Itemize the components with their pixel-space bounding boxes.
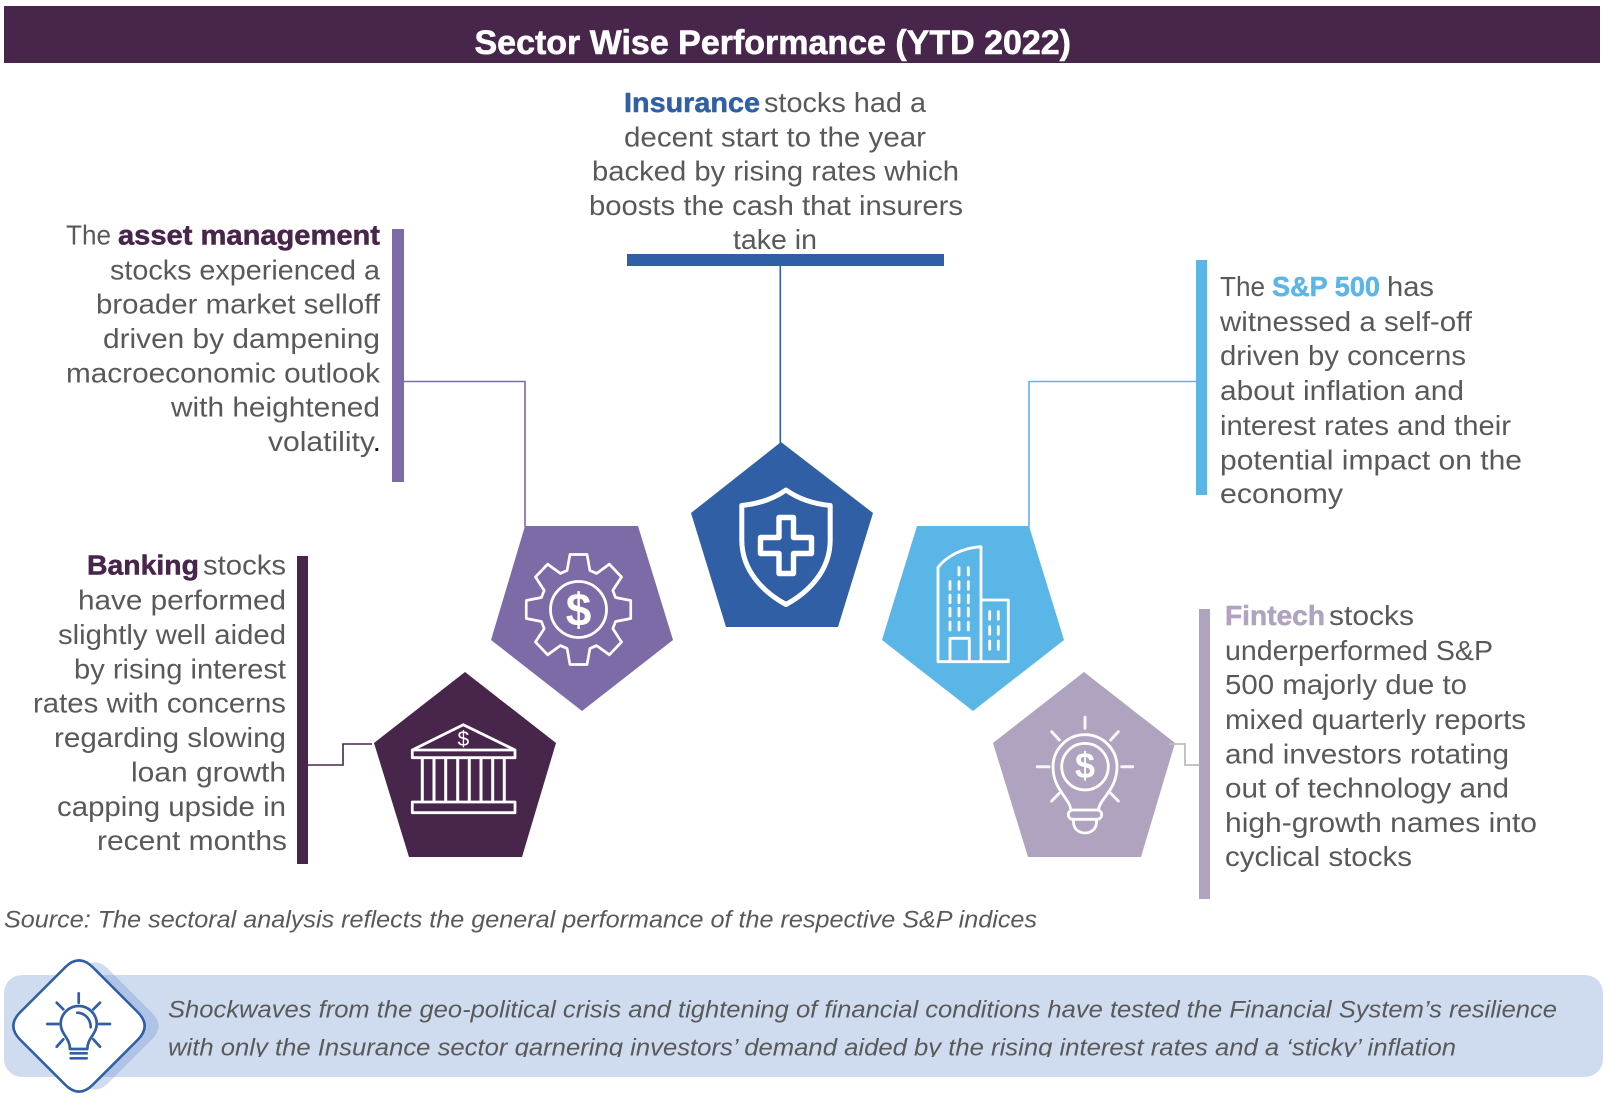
pentagon: asset management xyxy=(491,526,673,711)
fintech connector xyxy=(1199,609,1210,899)
text block: insurance: backed by rising rates which xyxy=(592,156,959,186)
text block: S&P 500: about inflation and xyxy=(1220,375,1464,406)
icon: light bulb with dollar xyxy=(1037,717,1133,833)
text block: banking: Banking xyxy=(87,550,199,580)
text block: insurance: decent start to the year xyxy=(624,122,926,152)
pentagon: S&P 500 xyxy=(882,526,1064,711)
callout text: Shockwaves from the geo-political crisis and tightening of financial conditions have tested the Financial System’s resilience xyxy=(168,996,1557,1024)
text block: banking: regarding slowing xyxy=(54,722,286,753)
text block: banking: rates with concerns xyxy=(33,688,286,718)
text block: banking: by rising interest xyxy=(74,654,286,684)
text block: banking: capping upside in xyxy=(57,791,286,822)
text block: asset management: The xyxy=(66,220,111,250)
callout text: with only the Insurance sector garnering investors’ demand aided by the rising interest rates and a ‘sticky’ inflation xyxy=(168,1034,1456,1062)
S&P 500 connector xyxy=(1029,260,1207,527)
callout panel xyxy=(4,960,1603,1092)
text block: S&P 500: witnessed a self-off xyxy=(1219,306,1472,337)
icon: bank building xyxy=(412,725,515,813)
text block: fintech: mixed quarterly reports xyxy=(1225,704,1526,735)
pentagon: fintech xyxy=(993,672,1175,857)
source note: Source: The sectoral analysis reflects the general performance of the respective S&P indices xyxy=(4,906,1037,934)
text block: banking: stocks xyxy=(203,550,286,580)
text block: fintech: high-growth names into xyxy=(1225,807,1537,838)
text block: fintech: stocks xyxy=(1329,600,1414,631)
text block: insurance: stocks had a xyxy=(764,87,926,118)
text block: banking: slightly well aided xyxy=(58,619,286,650)
pentagon: insurance xyxy=(691,442,873,627)
text block: fintech: and investors rotating xyxy=(1225,739,1509,770)
text block: S&P 500: economy xyxy=(1220,478,1343,509)
text block: asset management xyxy=(66,220,381,457)
text block: S&P 500: has xyxy=(1387,271,1434,302)
icon: shield with cross xyxy=(742,490,830,604)
text block: insurance: boosts the cash that insurers xyxy=(589,190,963,221)
text block: fintech: underperformed S&P xyxy=(1225,635,1493,666)
text block: S&P 500: S&P 500 xyxy=(1272,271,1380,302)
text block: fintech: out of technology and xyxy=(1225,772,1509,804)
text block: insurance: Insurance xyxy=(624,87,760,118)
text block: S&P 500: The xyxy=(1220,271,1265,302)
diamond shadow inside panel xyxy=(102,975,158,1077)
callout text xyxy=(168,1000,1556,1057)
text block: banking: have performed xyxy=(78,584,286,616)
text block: asset management: broader market selloff xyxy=(96,288,380,320)
text block: S&P 500: interest rates and their xyxy=(1220,410,1511,441)
text block: fintech: Fintech xyxy=(1225,600,1325,631)
text block: asset management: macroeconomic outlook xyxy=(66,358,381,388)
text block: fintech: 500 majorly due to xyxy=(1225,669,1467,700)
insurance connector xyxy=(627,254,944,443)
text block: asset management: driven by dampening xyxy=(103,323,380,354)
text block: S&P 500: potential impact on the xyxy=(1220,444,1522,476)
text block: S&P 500: driven by concerns xyxy=(1220,340,1466,371)
text block: fintech: cyclical stocks xyxy=(1225,841,1412,872)
fintech connector line xyxy=(1169,744,1199,765)
icon: gear with dollar: $ xyxy=(566,584,591,636)
pentagon: banking xyxy=(374,672,556,857)
icon: gear with dollar xyxy=(526,554,631,664)
icon: light bulb with dollar: $ xyxy=(1075,745,1095,786)
text block: asset management: asset management xyxy=(118,220,380,250)
text block: S&P 500 xyxy=(1219,271,1522,509)
text block: insurance xyxy=(589,87,963,255)
icon: bank building: $ xyxy=(457,728,469,751)
title banner: Sector Wise Performance (YTD 2022) xyxy=(474,24,1071,62)
banking connector xyxy=(297,556,372,864)
asset management connector xyxy=(392,229,525,527)
icon: office buildings xyxy=(938,547,1008,662)
text block: asset management: stocks experienced a xyxy=(110,254,380,285)
text block: banking: loan growth xyxy=(131,756,286,788)
icon: light bulb xyxy=(47,993,110,1058)
text block: asset management: with heightened xyxy=(170,392,380,422)
diamond badge xyxy=(13,960,145,1092)
text block: insurance: take in xyxy=(733,224,817,255)
text block: banking xyxy=(33,550,287,856)
title banner xyxy=(4,6,1600,63)
text block: asset management: volatility . xyxy=(268,426,381,457)
text block: fintech xyxy=(1225,600,1537,872)
text block: banking: recent months xyxy=(97,825,287,856)
diamond shadow xyxy=(31,962,159,1090)
